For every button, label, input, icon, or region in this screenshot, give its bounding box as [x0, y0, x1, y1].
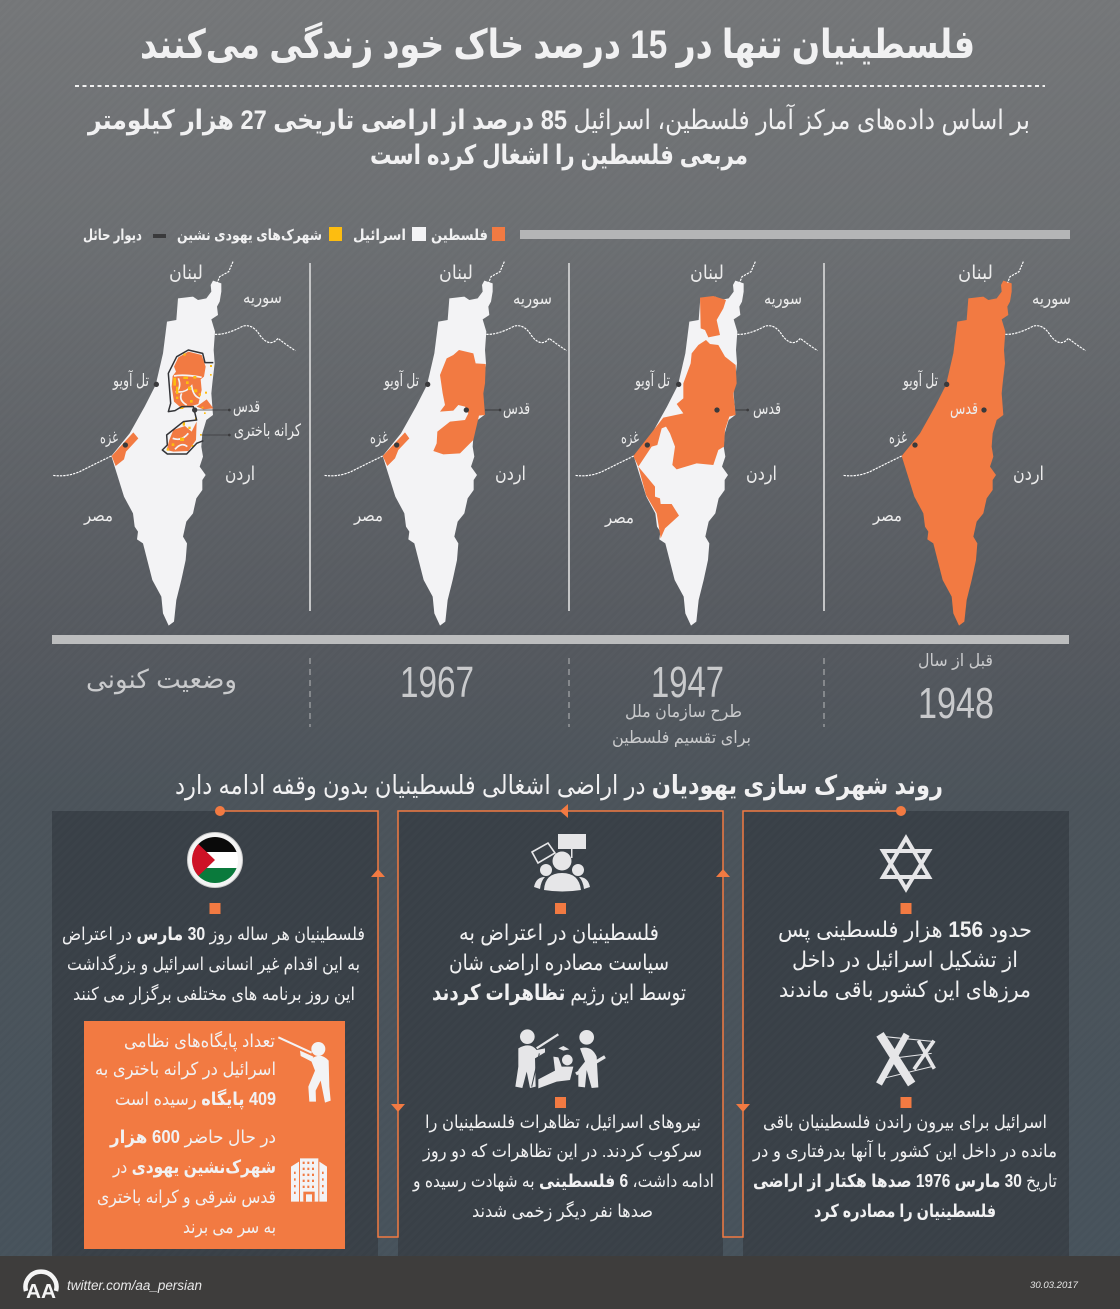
- panel: protests: [412, 834, 714, 1222]
- legend: شهرک‌های یهودی نشین: [177, 227, 322, 244]
- period label: 1947: برای تقسیم فلسطین: [612, 728, 751, 748]
- map: current situation: مصر: [83, 506, 113, 525]
- callout: settlers: به سر می برند: [183, 1217, 276, 1238]
- map: 1947: قدس: [753, 399, 781, 418]
- flow line with arrows: [215, 804, 906, 1237]
- map: current situation: قدس: [233, 397, 260, 416]
- legend: [83, 227, 1070, 244]
- icon: protesters: [532, 834, 590, 892]
- icon: barbed wire: [879, 1034, 935, 1084]
- callout: settlers: [84, 1021, 345, 1249]
- map: current situation: تل آویو: [112, 369, 149, 390]
- map: before 1948: مصر: [872, 506, 902, 525]
- map: 1967: تل آویو: [383, 369, 419, 390]
- legend: دیوار حائل: [83, 227, 142, 244]
- period label: before 1948: قبل از سال: [918, 651, 993, 670]
- period label: 1947: [612, 658, 751, 748]
- map: before 1948: قدس: [950, 399, 978, 418]
- period label: before 1948: [918, 651, 994, 728]
- panel: protests: توسط این رژیم تظاهرات کردند: [432, 980, 686, 1006]
- panel: 156 thousand remained: مرزهای این کشور باقی ماندند: [779, 977, 1031, 1002]
- column dividers: [310, 263, 824, 611]
- period label: 1947: 1947: [651, 658, 724, 707]
- footer: 30.03.2017: [1030, 1280, 1079, 1291]
- map: current situation: غزه: [100, 428, 118, 447]
- map: current situation: سوریه: [243, 288, 282, 307]
- map: 1947: تل آویو: [634, 369, 670, 390]
- map: 1947: سوریه: [764, 289, 802, 308]
- map: 1967: لبنان: [439, 263, 473, 284]
- footer: [0, 1256, 1120, 1309]
- map: before 1948: [843, 262, 1086, 626]
- footer: twitter.com/aa_persian: [67, 1278, 202, 1293]
- icon: AA logo: [25, 1272, 57, 1303]
- map: current situation: اردن: [225, 464, 255, 485]
- section heading: روند شهرک سازی یهودیان در اراضی اشغالی فلسطینیان بدون وقفه ادامه دارد: [175, 770, 943, 801]
- map: 1967: مصر: [353, 506, 383, 525]
- map: before 1948: سوریه: [1032, 289, 1071, 308]
- map: before 1948: غزه: [889, 428, 907, 447]
- panel: 156 thousand remained: اسرائیل برای بیرون راندن فلسطینیان باقی: [763, 1112, 1047, 1133]
- title: فلسطینیان تنها در 15 درصد خاک خود زندگی می‌کنند: [140, 21, 975, 68]
- callout: settlers: قدس شرقی و کرانه باختری: [97, 1187, 276, 1208]
- map: current situation: لبنان: [169, 263, 203, 284]
- panel: protests: نیروهای اسرائیل، تظاهرات فلسطینیان را: [425, 1112, 701, 1133]
- subtitle: مربعی فلسطین را اشغال کرده است: [370, 140, 748, 171]
- map: before 1948: لبنان: [958, 263, 993, 284]
- map: before 1948: تل آویو: [902, 369, 938, 390]
- icon: soldier: [278, 1037, 331, 1103]
- panel backgrounds: [52, 811, 1069, 1256]
- period label: current situation: وضعیت کنونی: [86, 664, 237, 695]
- map: 1967: اردن: [495, 464, 526, 485]
- map: 1947: اردن: [746, 464, 777, 485]
- map: 1967: [324, 262, 567, 626]
- panel: protests: سیاست مصادره اراضی شان: [449, 950, 669, 975]
- panel: 156 thousand remained: [752, 838, 1057, 1222]
- subtitle: [86, 104, 1030, 171]
- map: 1967: غزه: [370, 428, 388, 447]
- map: 1967: قدس: [503, 399, 530, 418]
- map: current situation: [52, 262, 302, 626]
- period label: 1967: 1967: [400, 658, 474, 707]
- panel: protests: ادامه داشت، 6 فلسطینی به شهادت رسیده و: [412, 1171, 714, 1192]
- panel: 30 March commemoration: فلسطینیان هر ساله روز 30 مارس در اعتراض: [62, 924, 365, 945]
- period label: 1947: طرح سازمان ملل: [625, 702, 742, 722]
- panel: 30 March commemoration: [62, 832, 365, 1249]
- callout: settlers: 409 پایگاه رسیده است: [115, 1088, 276, 1110]
- legend: فلسطین: [431, 227, 488, 244]
- map: 1947: غزه: [621, 428, 639, 447]
- callout: settlers: شهرک‌نشین یهودی در: [112, 1157, 276, 1178]
- callout: settlers: تعداد پایگاه‌های نظامی: [124, 1030, 275, 1052]
- panel: protests: فلسطینیان در اعتراض به: [459, 920, 659, 946]
- map: 1947: مصر: [604, 508, 634, 527]
- period label: before 1948: 1948: [918, 679, 994, 728]
- icon: AA logo: AA: [26, 1281, 56, 1303]
- panel: 156 thousand remained: از تشکیل اسرائیل در داخل: [792, 947, 1018, 972]
- icon: building: [291, 1158, 327, 1202]
- panel: 156 thousand remained: فلسطینیان را مصادره کرد: [814, 1201, 996, 1222]
- panel: 156 thousand remained: مانده در داخل این کشور با آنها بدرفتاری و در: [752, 1139, 1057, 1162]
- map: before 1948: اردن: [1013, 464, 1044, 485]
- map: current situation: کرانه باختری: [234, 421, 302, 440]
- legend: اسرائیل: [353, 227, 406, 244]
- panel: 156 thousand remained: تاریخ 30 مارس 1976 صدها هکتار از اراضی: [753, 1171, 1057, 1192]
- panel: 30 March commemoration: این روز برنامه های مختلفی برگزار می کنند: [73, 983, 355, 1005]
- callout: settlers: اسرائیل در کرانه باختری به: [95, 1059, 276, 1080]
- panel: 156 thousand remained: حدود 156 هزار فلسطینی پس: [778, 917, 1032, 943]
- map: 1947: [575, 262, 818, 626]
- map: 1967: سوریه: [513, 289, 552, 308]
- icon: Palestinian flag: [188, 832, 242, 888]
- callout: settlers: در حال حاضر 600 هزار: [109, 1127, 276, 1148]
- subtitle: بر اساس داده‌های مرکز آمار فلسطین، اسرائیل 85 درصد از اراضی تاریخی 27 هزار کیلومتر: [86, 104, 1030, 136]
- map: 1947: لبنان: [690, 263, 724, 284]
- icon: star: [883, 838, 929, 889]
- panel: 30 March commemoration: به این اقدام غیر انسانی اسرائیل و بزرگداشت: [67, 953, 360, 975]
- panel: protests: سرکوب کردند. در این تظاهرات که دو روز: [422, 1141, 702, 1162]
- icon: soldiers beating protester: [515, 1029, 605, 1088]
- panel: protests: صدها نفر دیگر زخمی شدند: [472, 1200, 653, 1222]
